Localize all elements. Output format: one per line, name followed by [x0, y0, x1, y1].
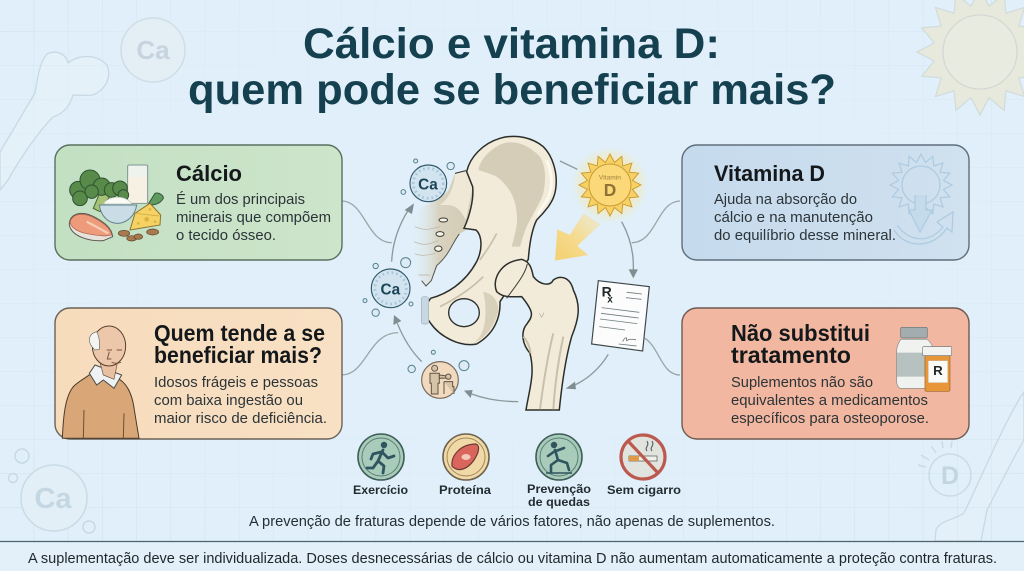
text: treatment description — [731, 375, 929, 427]
icon: vitamin D sun: Vitamin — [599, 174, 621, 181]
text: calcium description: É um dos principais — [176, 191, 305, 208]
text: vitamin D description: cálcio e na manutenção — [714, 210, 873, 226]
icon: elderly man — [62, 326, 139, 438]
background: femur bottom right — [935, 392, 1024, 541]
text: calcium description — [176, 191, 331, 244]
arrows: process cycle — [392, 161, 638, 402]
divider and footer note: A suplementação deve ser individualizada. Doses desnecessárias de cálcio ou vitamina D não aumentam automaticamente a proteção contra fraturas. — [28, 550, 997, 567]
text: who benefits description — [154, 375, 327, 427]
icon: no smoking — [621, 435, 665, 479]
title — [188, 20, 836, 114]
icon labels: de quedas — [528, 495, 590, 509]
connector lines — [342, 201, 680, 375]
panel: calcium — [55, 145, 342, 260]
femur — [495, 259, 578, 410]
icon: person helping elder — [408, 350, 469, 398]
background: vitamin D bubble — [918, 441, 971, 496]
text: calcium description: minerais que compõem — [176, 210, 331, 226]
icon: fall prevention — [536, 434, 582, 480]
central illustration — [363, 136, 649, 410]
icon labels: Sem cigarro — [607, 483, 681, 497]
background: vitamin D bubble: D — [941, 462, 959, 490]
calcium molecule lower — [363, 258, 413, 316]
heading: treatment: Não substitui — [731, 320, 870, 346]
icon labels: Prevenção — [527, 482, 591, 496]
icon labels: Exercício — [353, 483, 408, 497]
background: calcium bubble top — [121, 18, 185, 82]
text: vitamin D description — [714, 192, 896, 244]
panel: vitamin D — [682, 145, 969, 260]
arrow: sunlight to bone — [555, 213, 601, 261]
pubic joint — [421, 297, 429, 324]
icon: prescription: x — [607, 295, 613, 306]
icon: vitamin D sun — [572, 147, 648, 223]
icon: medicine bottles — [897, 327, 952, 391]
heading: who benefits: beneficiar mais? — [154, 342, 322, 368]
text: who benefits description: com baixa ingestão ou — [154, 393, 303, 409]
heading: who benefits — [154, 320, 325, 368]
icon labels: Proteína — [439, 483, 491, 497]
text: who benefits description: maior risco de deficiência. — [154, 411, 327, 427]
icon: prescription — [592, 281, 649, 351]
icon: faint sun and arrows — [890, 154, 953, 244]
text: vitamin D description: do equilíbrio desse mineral. — [714, 228, 896, 244]
pelvis bone — [426, 136, 556, 345]
calcium molecule upper — [401, 159, 454, 202]
icon: medicine bottles: R — [933, 363, 943, 378]
title: quem pode se beneficiar mais? — [188, 66, 836, 114]
background: sun top right — [917, 0, 1024, 115]
icon: calcium foods — [69, 165, 163, 241]
text: prevention note: A prevenção de fraturas depende de vários fatores, não apenas de suplementos. — [249, 514, 775, 530]
heading: calcium: Cálcio — [176, 161, 242, 186]
icon: protein — [443, 434, 489, 480]
panel: does not replace treatment — [682, 308, 969, 439]
heading: who benefits: Quem tende a se — [154, 320, 325, 346]
icon: exercise — [358, 434, 404, 480]
heading: treatment: tratamento — [731, 342, 851, 368]
text: who benefits description: Idosos frágeis e pessoas — [154, 375, 318, 391]
background: femur top left — [0, 52, 109, 190]
text: treatment description: específicos para osteoporose. — [731, 411, 929, 427]
calcium molecule lower: Ca — [381, 281, 401, 298]
icon labels — [353, 482, 681, 509]
text: calcium description: o tecido ósseo. — [176, 228, 276, 244]
heading: vitamin D: Vitamina D — [714, 161, 825, 186]
text: treatment description: equivalentes a medicamentos — [731, 393, 928, 409]
icon: vitamin D sun: D — [604, 180, 616, 200]
text: treatment description: Suplementos não são — [731, 375, 873, 391]
title: Cálcio e vitamina D: — [303, 20, 720, 68]
sacrum — [411, 171, 473, 286]
icon: prescription: R — [602, 284, 612, 300]
heading: treatment — [731, 320, 870, 368]
background: calcium bubble bottom — [8, 449, 95, 533]
background: calcium bubble top: Ca — [136, 35, 170, 65]
background: calcium bubble bottom: Ca — [34, 483, 72, 515]
calcium molecule upper: Ca — [418, 176, 438, 193]
text: vitamin D description: Ajuda na absorção do — [714, 192, 857, 208]
panel: who benefits — [55, 308, 342, 439]
